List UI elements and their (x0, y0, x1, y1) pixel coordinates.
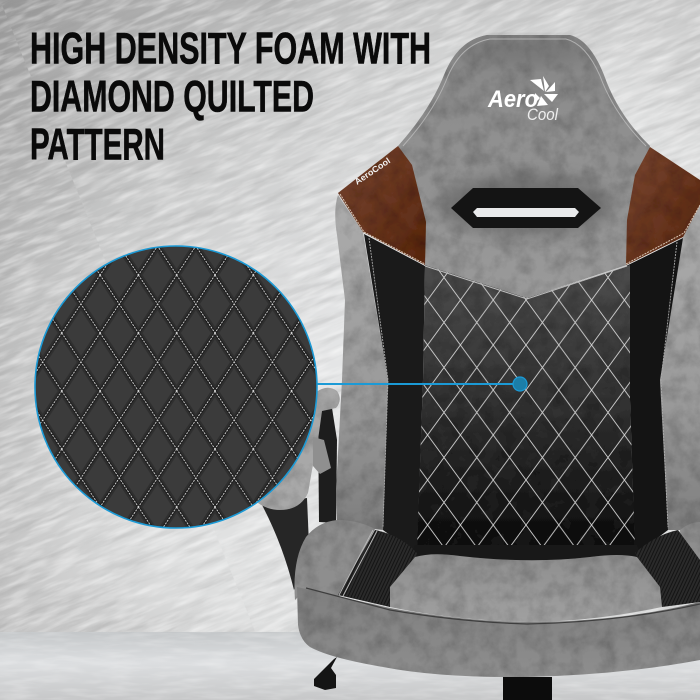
AeroCool headrest logo (487, 76, 559, 124)
seat cushion top (390, 554, 662, 622)
headrest shading (466, 40, 586, 64)
AeroCool shoulder label: AeroCool (353, 155, 392, 187)
armrest mechanism (318, 408, 337, 523)
side bolster black left (364, 234, 425, 555)
callout connector line (310, 383, 520, 385)
carbon side stitching (339, 530, 377, 596)
right back wing (660, 205, 700, 530)
shoulder stitching (340, 194, 700, 264)
logo wordmark Aero: Aero (487, 86, 538, 113)
chair (258, 35, 700, 700)
armrest pad (258, 388, 340, 510)
carbon side left (338, 530, 417, 607)
title: HIGH DENSITY FOAM WITH (30, 24, 431, 74)
seat front seam (306, 588, 700, 624)
brown shoulder left (338, 146, 426, 265)
armrest knob (313, 437, 331, 474)
carbon side right (635, 530, 700, 607)
headrest stitching (403, 39, 646, 146)
seat left bolster (294, 520, 375, 600)
chair arm strut (262, 498, 309, 590)
seat front (297, 587, 700, 677)
quilted centre panel (415, 260, 640, 550)
title: PATTERN (30, 120, 165, 170)
callout anchor dot (513, 377, 527, 391)
panel top seam (425, 266, 627, 299)
seat right bolster (680, 522, 700, 600)
side bolster black right (626, 238, 683, 555)
bolster stitching (369, 238, 677, 527)
height lever (314, 657, 337, 690)
slot shadow (438, 175, 614, 235)
brown shoulder right (626, 147, 700, 265)
callout magnified circle (30, 240, 325, 535)
title (30, 24, 431, 170)
seat gap (405, 545, 645, 570)
logo fan icon (530, 76, 558, 106)
title: DIAMOND QUILTED (30, 72, 314, 122)
gas-lift column (503, 677, 552, 700)
background: floor (0, 632, 700, 700)
logo wordmark Cool: Cool (527, 105, 559, 124)
headrest slot (451, 188, 601, 228)
back wings (335, 195, 388, 530)
headrest and upper back (398, 35, 650, 298)
